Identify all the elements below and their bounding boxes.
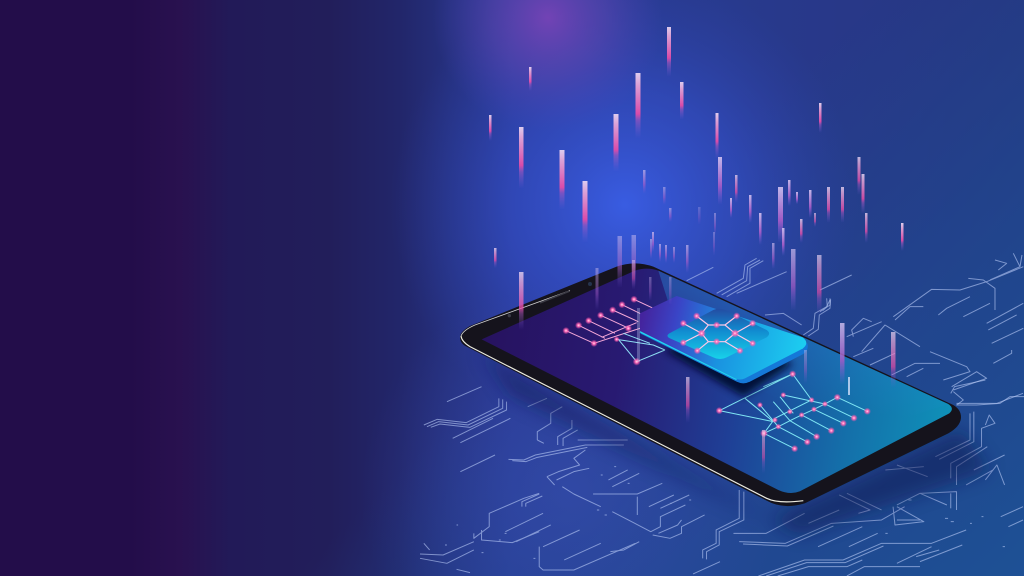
SIM shadow [663, 337, 793, 397]
screen sheen [658, 271, 948, 437]
phone cast shadow [480, 350, 990, 535]
SIM top face [640, 296, 806, 379]
circuit: left screen traces [562, 296, 665, 366]
phone screen [482, 269, 952, 493]
circuit traces: lower board [420, 380, 1023, 576]
SIM contact pad [667, 309, 769, 359]
circuit traces: upper centre board [687, 258, 831, 336]
phone [460, 263, 961, 506]
phone body [460, 263, 961, 506]
top edge highlight [461, 291, 570, 336]
circuit traces: right board [820, 253, 1024, 405]
contact pad traces [680, 312, 756, 354]
SIM card [640, 296, 808, 383]
edge highlight [461, 336, 803, 502]
SIM edge [640, 330, 808, 383]
circuit: right screen traces [716, 370, 871, 452]
speaker and sensors [508, 282, 592, 317]
rising light streaks [489, 27, 904, 474]
